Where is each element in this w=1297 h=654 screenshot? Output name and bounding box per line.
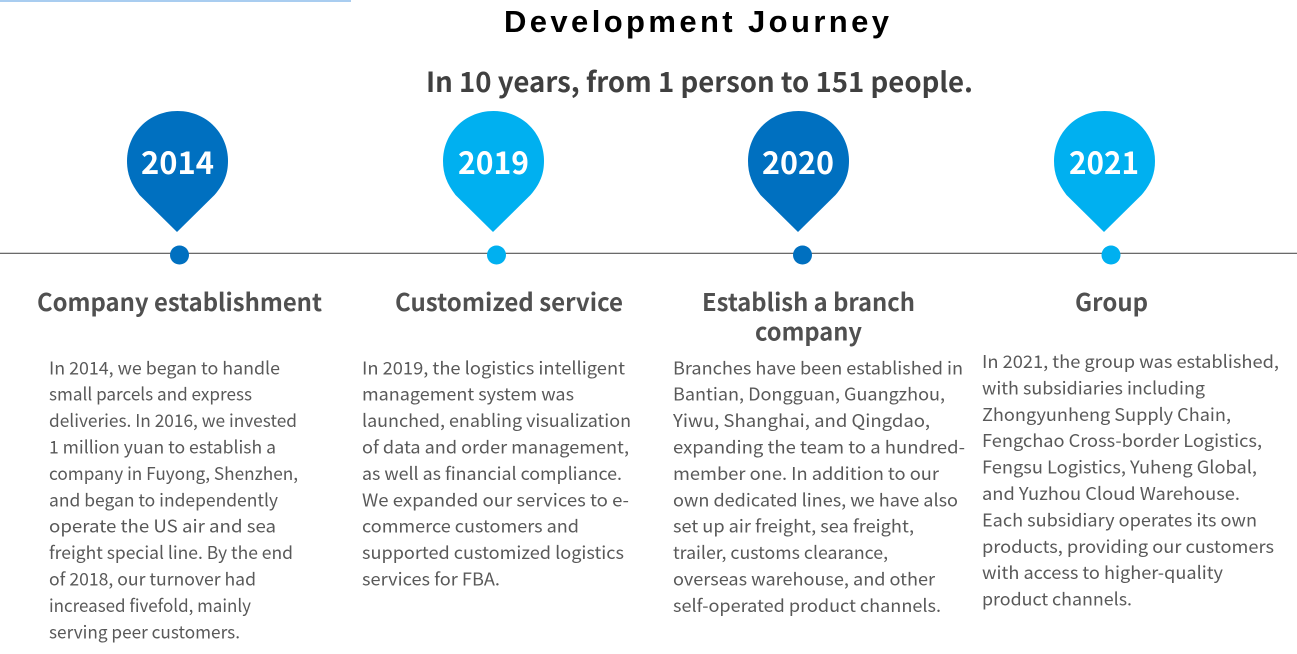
text block: 2020: set up air freight, sea freight, [673, 514, 914, 539]
text block: 2021: In 2021, the group was established, [982, 349, 1279, 374]
heading: Establish a branch company: company [755, 314, 862, 348]
text block: 2020 [672, 355, 965, 618]
text block: 2014: 1 million yuan to establish a [49, 434, 276, 460]
text block: 2021: Fengchao Cross-border Logistics, [982, 428, 1262, 453]
pin: 2019 [443, 111, 544, 232]
timeline marker: 2021 [1102, 246, 1120, 264]
title: Development Journey [504, 4, 890, 39]
heading: Establish a branch company [702, 284, 915, 348]
text block: 2014: deliveries. In 2016, we invested [49, 408, 297, 433]
pin: 2014: 2014 [141, 138, 214, 183]
text block: 2020: own dedicated lines, we have also [673, 487, 958, 512]
pin: 2020: 2020 [762, 138, 834, 183]
text block: 2021: Zhongyunheng Supply Chain, [982, 402, 1231, 427]
text block: 2014: operate the US air and sea [49, 514, 276, 539]
text block: 2014: and began to independently [49, 487, 278, 512]
text block: 2021: Fengsu Logistics, Yuheng Global, [982, 455, 1257, 480]
subtitle: In 10 years, from 1 person to 151 people. [426, 60, 973, 100]
text block: 2020: trailer, customs clearance, [673, 540, 888, 565]
heading: Company establishment: Company establishment [37, 284, 322, 319]
text block: 2021 [982, 349, 1279, 612]
text block: 2019: services for FBA. [362, 566, 500, 592]
pin: 2021 [1054, 111, 1155, 232]
text block: 2021: Each subsidiary operates its own [982, 507, 1257, 532]
pin: 2021: 2021 [1069, 138, 1139, 183]
text block: 2019: supported customized logistics [362, 540, 624, 565]
text block: 2014: small parcels and express [49, 382, 252, 407]
text block: 2019: launched, enabling visualization [362, 408, 631, 433]
text block: 2014 [49, 355, 298, 644]
heading: Establish a branch company: Establish a branch [702, 284, 915, 319]
heading: Group: Group [1075, 284, 1148, 319]
text block: 2020: overseas warehouse, and other [673, 566, 935, 592]
text block: 2014: freight special line. By the end [49, 540, 293, 565]
text block: 2021: product channels. [982, 587, 1132, 612]
top accent strip [0, 0, 351, 2]
text block: 2020: Bantian, Dongguan, Guangzhou, [673, 382, 945, 407]
text block: 2019 [362, 355, 631, 592]
pin: 2019: 2019 [458, 138, 529, 183]
text block: 2021: and Yuzhou Cloud Warehouse. [982, 481, 1240, 506]
text block: 2014: of 2018, our turnover had [49, 566, 256, 592]
text block: 2020: Yiwu, Shanghai, and Qingdao, [672, 408, 930, 433]
timeline marker: 2019 [487, 246, 506, 264]
text block: 2020: member one. In addition to our [673, 461, 939, 486]
timeline axis [0, 252, 1297, 254]
text block: 2020: Branches have been established in [673, 355, 963, 380]
text block: 2014: In 2014, we began to handle [49, 355, 280, 380]
text block: 2014: company in Fuyong, Shenzhen, [49, 461, 298, 486]
text block: 2021: with access to higher-quality [982, 560, 1223, 585]
text block: 2021: products, providing our customers [982, 534, 1274, 559]
text block: 2014: serving peer customers. [49, 619, 240, 644]
heading: Customized service: Customized service [395, 284, 623, 319]
pin: 2020 [748, 111, 849, 232]
pin: 2014 [127, 111, 228, 232]
text block: 2019: as well as financial compliance. [362, 461, 622, 486]
text block: 2019: of data and order management, [362, 434, 629, 460]
text block: 2021: with subsidiaries including [982, 375, 1205, 400]
text block: 2019: We expanded our services to e- [362, 487, 629, 512]
text block: 2020: expanding the team to a hundred- [673, 434, 965, 460]
text block: 2019: commerce customers and [362, 514, 579, 539]
text block: 2019: In 2019, the logistics intelligent [362, 355, 625, 380]
text block: 2014: increased fivefold, mainly [49, 593, 251, 618]
text block: 2020: self-operated product channels. [673, 593, 941, 618]
text block: 2019: management system was [362, 382, 574, 407]
timeline marker: 2020 [793, 246, 812, 264]
timeline marker: 2014 [170, 246, 189, 264]
